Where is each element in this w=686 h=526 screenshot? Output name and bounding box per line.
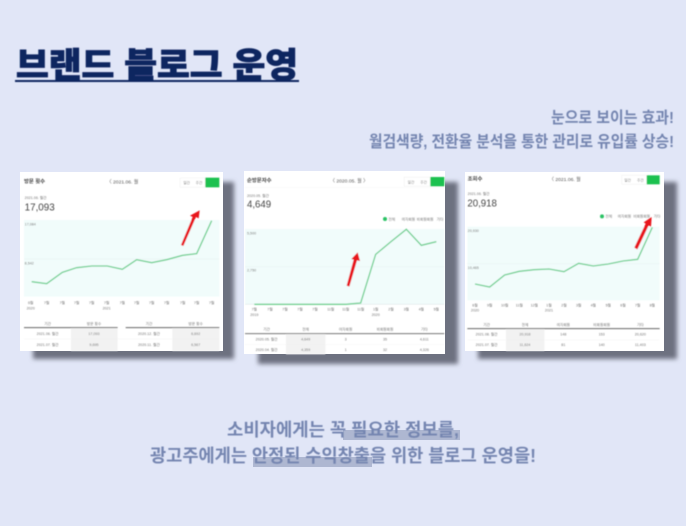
panel header (24, 177, 219, 200)
panel header: 일간 (408, 179, 415, 184)
line chart: 10월 (501, 302, 508, 307)
panel header (245, 176, 444, 198)
data table: 전체 (302, 326, 309, 331)
line chart: 20,930 (468, 229, 479, 233)
data table: 9,695 (89, 343, 99, 347)
line chart: 3월 (576, 302, 581, 307)
line chart: 7월 (312, 307, 318, 312)
panel header: 2021.06. 월간 (468, 191, 490, 196)
line chart: 7월 (252, 307, 257, 312)
bottom message with highlights (150, 420, 536, 467)
data table: 비회원회원 (593, 322, 610, 327)
line chart: 7월 (180, 300, 185, 305)
data table: 4,649 (301, 338, 310, 342)
data table: 2020.04. 월간 (256, 347, 278, 352)
data table: 방문 횟수 (188, 321, 204, 326)
line chart: 7월 (104, 300, 109, 305)
arrow: red rising (181, 210, 200, 246)
line chart: 5월 (434, 307, 439, 312)
data table: 6,692 (191, 332, 200, 336)
panel header: 2020.05. 월간 (247, 193, 270, 198)
line chart: 2,750 (247, 269, 256, 273)
data table: 17,093 (88, 332, 100, 336)
chart legend: 전체 (605, 214, 612, 219)
title: 브랜드 블로그 운영 (16, 47, 298, 85)
data table: 140 (599, 343, 605, 347)
chart legend: 비회원회원 (633, 214, 650, 219)
line chart: 11월 (342, 307, 349, 312)
line chart: 8월 (650, 302, 655, 307)
data table: 1 (345, 348, 347, 352)
panel header: 2021.06. 월간 (25, 195, 47, 200)
subtitle text block: 눈으로 보이는 효과! (551, 109, 674, 127)
line chart: 9월 (487, 302, 492, 307)
data table: 2020.12. 월간 (138, 331, 161, 336)
metric value: 4,649 (247, 200, 271, 211)
data table: 비회원회원 (377, 326, 393, 331)
panel header: 〈 2020.05. 월 〉 (330, 178, 368, 185)
line chart: 2020 (27, 306, 35, 310)
line chart: 1월 (373, 307, 378, 312)
data table: 2021.06. 월간 (37, 331, 59, 336)
panel header (468, 174, 660, 196)
line chart: 3월 (404, 307, 409, 312)
chart legend: 여자회원 (402, 216, 415, 221)
line chart: 5월 (606, 302, 611, 307)
line chart: 17,084 (25, 222, 36, 226)
data table: 여자회원 (557, 322, 570, 327)
chart legend: 전체 (388, 216, 395, 221)
panel header: 일간 (624, 178, 632, 183)
line chart: 7월 (282, 307, 288, 312)
line chart: 7월 (164, 300, 169, 305)
line chart (24, 220, 219, 310)
data table: 20,620 (635, 332, 646, 336)
line chart: 7월 (74, 300, 79, 305)
arrow: red rising (347, 252, 360, 287)
panel header: 조회수 (468, 174, 482, 182)
panel header: 〈 2021.06. 월 (549, 176, 581, 183)
data table: 기타 (637, 322, 644, 327)
data table: 20,918 (519, 332, 531, 336)
data table: 기타 (421, 326, 428, 331)
data table: 11,624 (520, 343, 530, 347)
chart legend: 기타 (654, 214, 661, 219)
line chart: 7월 (89, 300, 94, 305)
data table: 기간 (44, 321, 52, 326)
line chart: 2019 (250, 313, 258, 317)
data table: 11,403 (635, 343, 646, 347)
data table: 4,359 (301, 348, 310, 352)
line chart: 7월 (635, 302, 640, 307)
data table (467, 322, 660, 351)
line chart: 4월 (591, 302, 596, 307)
data table: 여자회원 (339, 326, 352, 331)
line chart: 2020 (471, 309, 479, 313)
panel header: 방문 횟수 (24, 177, 45, 185)
data table: 방문 횟수 (87, 321, 102, 326)
bottom message with highlights: 광고주에게는 안정된 수익창출을 위한 블로그 운영을! (150, 446, 536, 466)
line chart: 1월 (546, 302, 552, 307)
line chart: 10,465 (468, 266, 479, 270)
chart legend: 비회원회원 (417, 216, 433, 221)
metric value: 20,918 (467, 198, 497, 209)
data table: 2020.05. 월간 (256, 337, 278, 342)
data table (24, 321, 219, 351)
line chart: 8,542 (25, 261, 34, 265)
data table: 2021.07. 월간 (476, 342, 498, 347)
line chart: 7월 (134, 300, 139, 305)
data table: 2021.08. 월간 (476, 331, 498, 336)
line chart (467, 227, 660, 313)
data table: 35 (383, 338, 387, 342)
data table: 기간 (146, 321, 153, 326)
line chart: 2월 (561, 302, 567, 307)
bottom message with highlights: 소비자에게는 꼭 필요한 정보를, (227, 420, 459, 440)
line chart: 5,500 (247, 232, 256, 236)
line chart: 11월 (516, 302, 523, 307)
line chart: 7월 (209, 300, 214, 305)
panel: visitors chart screenshot (20, 172, 234, 359)
data table (245, 326, 444, 354)
line chart: 2월 (388, 307, 394, 312)
line chart: 2021 (103, 306, 111, 310)
line chart: 7월 (120, 300, 125, 305)
line chart: 7월 (194, 300, 199, 305)
line chart: 7월 (297, 307, 303, 312)
line chart: 7월 (44, 300, 49, 305)
line chart: 7월 (149, 300, 154, 305)
panel header: 순방문자수 (247, 176, 272, 184)
panel: unique visitors chart screenshot (244, 171, 458, 364)
line chart: 2020 (372, 313, 380, 317)
panel header: 주간 (420, 179, 428, 184)
line chart: 11월 (357, 307, 364, 312)
panel header: 주간 (637, 178, 644, 183)
data table: 2021.07. 월간 (37, 342, 59, 347)
line chart: 7월 (60, 300, 65, 305)
data table: 6,567 (191, 343, 200, 347)
line chart: 2021 (545, 309, 553, 313)
line chart: 7월 (267, 307, 273, 312)
metric value: 17,093 (25, 202, 55, 213)
data table: 3 (345, 338, 347, 342)
data table: 153 (599, 332, 605, 336)
arrow: red rising (634, 217, 652, 249)
chart legend (600, 214, 661, 219)
data table: 32 (383, 348, 387, 352)
line chart: 6월 (472, 302, 478, 307)
line chart: 6월 (28, 300, 33, 305)
data table: 전체 (522, 322, 528, 327)
data table: 148 (560, 332, 566, 336)
data table: 2020.11. 월간 (138, 342, 160, 347)
panel header: 주간 (196, 180, 203, 185)
panel header: 〈 2021.06. 월 (107, 178, 139, 185)
line chart (245, 229, 444, 317)
data table: 4,611 (420, 338, 429, 342)
chart legend: 기타 (437, 216, 444, 221)
data table: 기간 (263, 326, 271, 331)
panel: page views chart screenshot (465, 172, 677, 359)
panel header: 일간 (183, 180, 191, 185)
line chart: 12월 (531, 302, 538, 307)
line chart: 4월 (419, 307, 424, 312)
subtitle text block (369, 109, 674, 151)
chart legend: 여자회원 (618, 214, 631, 219)
line chart: 6월 (620, 302, 626, 307)
data table: 기간 (483, 322, 491, 327)
data table: 4,326 (420, 348, 429, 352)
data table: 81 (561, 343, 565, 347)
line chart: 11월 (327, 307, 334, 312)
chart legend (383, 216, 444, 221)
